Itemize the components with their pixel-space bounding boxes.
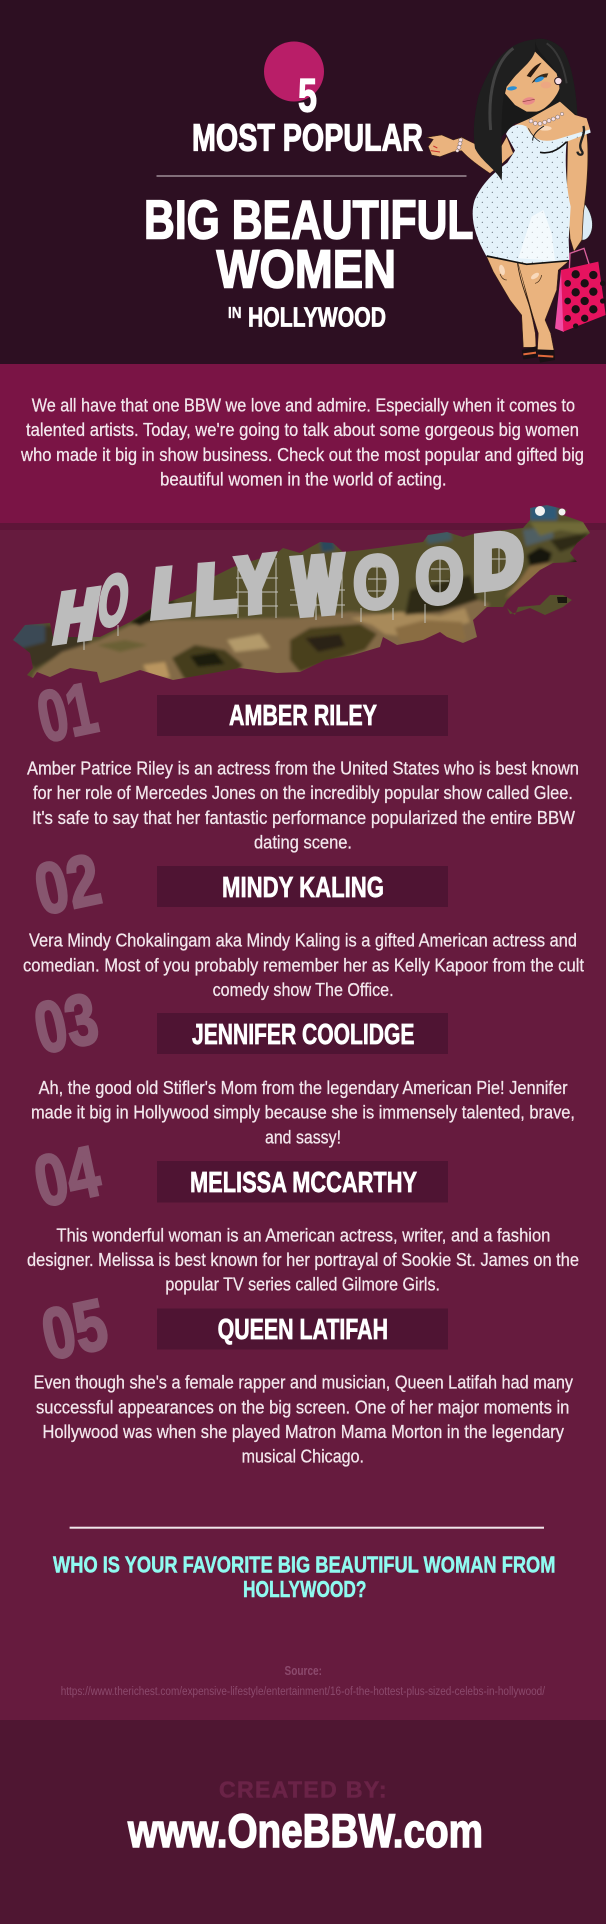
description: dating scene. xyxy=(254,832,352,852)
description: musical Chicago. xyxy=(242,1445,364,1466)
title: hollywood: HOLLYWOOD xyxy=(248,302,386,332)
sign letters: L xyxy=(194,551,238,628)
source xyxy=(61,1663,546,1698)
description: popular TV series called Gilmore Girls. xyxy=(165,1274,440,1295)
number 01: 01 xyxy=(31,668,104,758)
description xyxy=(34,1372,574,1466)
source: Source: xyxy=(284,1663,322,1678)
small hill island xyxy=(507,595,572,615)
sign letters: L xyxy=(149,552,195,631)
back hair, arm and hip xyxy=(474,39,577,177)
website address: www.OneBBW.com xyxy=(127,1804,483,1857)
sign letters: O xyxy=(353,539,400,626)
list item 4: Melissa McCarthy xyxy=(27,1131,579,1295)
icon: cartoon woman with shopping bag xyxy=(427,39,606,363)
hillside xyxy=(13,505,590,683)
name: QUEEN LATIFAH xyxy=(218,1314,388,1346)
name bar xyxy=(157,1161,448,1202)
list item 5: Queen Latifah xyxy=(34,1284,574,1466)
description xyxy=(31,1077,575,1147)
panel: list background xyxy=(0,523,606,1720)
description: comedy show The Office. xyxy=(213,979,394,1000)
intro text: beautiful women in the world of acting. xyxy=(160,468,446,490)
facial features xyxy=(527,63,542,77)
list item 2: Mindy Kaling xyxy=(23,839,584,1000)
created by label: CREATED BY: xyxy=(219,1777,386,1803)
title: big beautiful: BIG BEAUTIFUL xyxy=(144,188,474,250)
title: most popular: MOST POPULAR xyxy=(192,118,423,160)
face xyxy=(505,52,560,112)
description xyxy=(27,758,579,852)
name: AMBER RILEY xyxy=(229,700,377,732)
panel: footer background xyxy=(0,1720,606,1924)
intro text xyxy=(20,395,584,490)
icon: magenta circle xyxy=(264,42,324,102)
illustration: Hollywood sign on hillside xyxy=(13,505,590,683)
call to action question xyxy=(53,1551,556,1602)
name: MELISSA MCCARTHY xyxy=(190,1167,417,1199)
description: This wonderful woman is an American actress, writer, and a fashion xyxy=(56,1224,550,1245)
call to action question: HOLLYWOOD? xyxy=(243,1576,366,1602)
number 04: 04 xyxy=(28,1131,107,1223)
sign letters xyxy=(49,517,523,657)
legs xyxy=(487,257,570,363)
name: JENNIFER COOLIDGE xyxy=(192,1019,414,1051)
name: MINDY KALING xyxy=(222,872,384,904)
name bar xyxy=(157,866,448,907)
sign letters: Y xyxy=(237,539,273,629)
number 03: 03 xyxy=(28,978,105,1070)
name bar xyxy=(157,1308,448,1350)
dress xyxy=(473,125,591,263)
sign letters: W xyxy=(293,541,342,632)
chest and neck xyxy=(515,102,590,145)
tattoo xyxy=(577,126,584,155)
name bar xyxy=(157,1013,448,1054)
number 05: 05 xyxy=(35,1284,114,1376)
source: https://www.therichest.com/expensive-lifestyle/entertainment/16-of-the-hottest-plus-sized-celebs-in-hollywood/ xyxy=(61,1686,546,1698)
number 02: 02 xyxy=(28,839,107,931)
title: women: WOMEN xyxy=(216,240,396,300)
sign letters: H xyxy=(49,575,104,657)
description xyxy=(27,1224,579,1295)
title: number five: 5 xyxy=(298,68,317,122)
name bar xyxy=(157,695,448,736)
sign scaffolding xyxy=(84,537,508,650)
sign letters: O xyxy=(94,560,133,643)
necklace and bracelet xyxy=(456,112,564,152)
title: in: IN xyxy=(228,305,242,322)
sign letters: O xyxy=(415,532,464,622)
panel: header background xyxy=(0,0,606,364)
sign letters: D xyxy=(474,517,523,606)
title block xyxy=(144,42,474,332)
description: and sassy! xyxy=(265,1126,341,1147)
shopping bag xyxy=(555,248,606,332)
list item 1: Amber Riley xyxy=(27,668,579,852)
list item 3: Jennifer Coolidge xyxy=(28,978,575,1147)
front hair xyxy=(474,39,535,181)
description xyxy=(23,930,584,1000)
panel: introduction background xyxy=(0,364,606,523)
